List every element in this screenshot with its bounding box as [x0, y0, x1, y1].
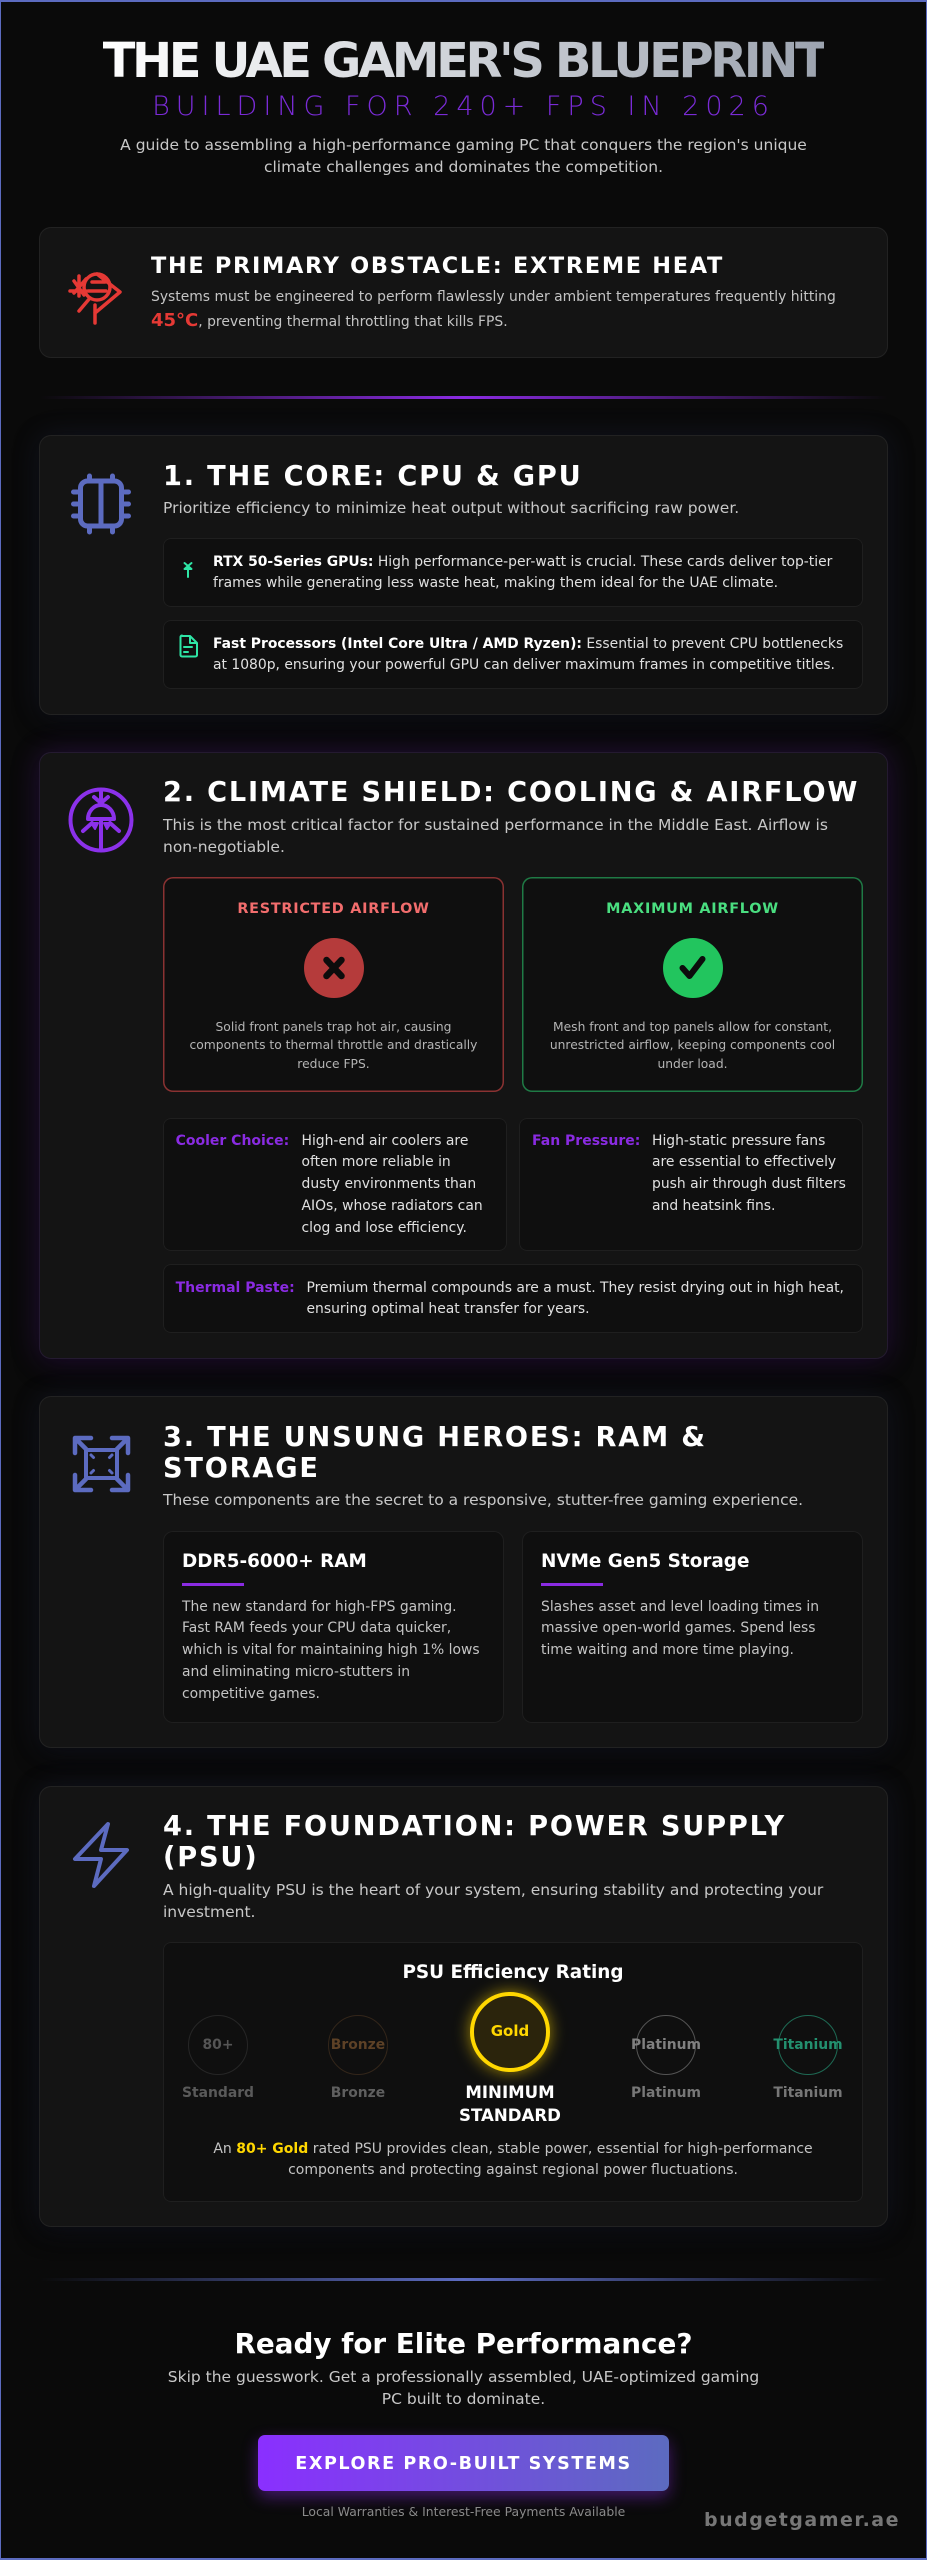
watermark: budgetgamer.ae: [704, 2509, 900, 2531]
comparison text: Mesh front and top panels allow for constant,: [553, 1020, 832, 1034]
panel: power supply: [39, 1786, 888, 2227]
text: ensuring optimal heat transfer for years.: [306, 1301, 590, 1317]
panel: ram and storage: [39, 1396, 888, 1748]
text: push air through dust filters: [652, 1176, 846, 1192]
title: THE UAE GAMER'S BLUEPRINT: [103, 33, 824, 89]
description: These components are the secret to a responsive, stutter-free gaming experience.: [163, 1491, 803, 1509]
text: Premium thermal compounds are a must. They resist drying out in high heat,: [306, 1280, 844, 1296]
rating: 80+ standard: 80+: [202, 2037, 233, 2053]
body text: Systems must be engineered to perform flawlessly under ambient temperatures frequently hitting: [151, 289, 836, 305]
card text: The new standard for high-FPS gaming.: [182, 1599, 457, 1615]
rating: platinum: [631, 2015, 701, 2101]
card text: Fast RAM feeds your CPU data quicker,: [182, 1620, 451, 1636]
icon: flame: [68, 272, 122, 325]
description: investment.: [163, 1903, 255, 1921]
card: ddr5 ram: [163, 1531, 504, 1723]
card text: massive open-world games. Spend less: [541, 1620, 815, 1636]
comparison: restricted airflow: [163, 877, 504, 1092]
comparison text: unrestricted airflow, keeping components cool: [550, 1038, 835, 1052]
button: EXPLORE PRO-BUILT SYSTEMS: [295, 2454, 632, 2474]
rating note: [213, 2141, 813, 2178]
heading: [163, 1422, 707, 1484]
text: are essential to effectively: [652, 1154, 836, 1170]
description: [168, 2368, 759, 2408]
comparison: maximum airflow: [522, 877, 863, 1092]
heading: PSU Efficiency Rating: [402, 1962, 624, 1983]
rating: gold minimum standard: MINIMUM: [465, 2083, 555, 2102]
card text: Slashes asset and level loading times in: [541, 1599, 819, 1615]
text: and heatsink fins.: [652, 1198, 775, 1214]
card text: Fast Processors (Intel Core Ultra / AMD Ryzen): Essential to prevent CPU bottlenecks: [213, 636, 843, 652]
rating: platinum: Platinum: [631, 2085, 701, 2101]
card heading: NVMe Gen5 Storage: [541, 1551, 749, 1572]
header: [103, 33, 824, 176]
description: non-negotiable.: [163, 838, 285, 856]
divider: [40, 396, 888, 399]
intro text: [120, 136, 807, 176]
heading: STORAGE: [163, 1453, 320, 1484]
card text: [213, 636, 843, 673]
description: Prioritize efficiency to minimize heat output without sacrificing raw power.: [163, 499, 739, 517]
body text: [151, 289, 836, 331]
button: [258, 2435, 669, 2491]
card: RTX GPUs: [163, 538, 863, 607]
icon: lightning bolt: [72, 1822, 130, 1888]
label: Cooler Choice:: [176, 1133, 289, 1149]
heading: [163, 1811, 786, 1873]
rating: titanium: Titanium: [773, 2037, 843, 2053]
description: [163, 1881, 824, 1921]
comparison text: components to thermal throttle and drastically: [190, 1038, 477, 1052]
rating: bronze: Bronze: [331, 2085, 385, 2101]
icon: fan: [68, 788, 134, 852]
comparison heading: MAXIMUM AIRFLOW: [606, 901, 779, 917]
card text: which is vital for maintaining high 1% lows: [182, 1642, 480, 1658]
rating: 80+ standard: Standard: [182, 2085, 254, 2101]
card text: frames while generating less waste heat, making them ideal for the UAE climate.: [213, 575, 778, 591]
rating: gold minimum standard: Gold: [491, 2022, 529, 2040]
card: psu efficiency rating: [163, 1942, 863, 2202]
footnote: Local Warranties & Interest-Free Payments Available: [302, 2504, 625, 2519]
panel: primary obstacle: [39, 227, 888, 358]
card text: and eliminating micro-stutters in: [182, 1664, 410, 1680]
accent bar: [182, 1583, 244, 1586]
card: thermal paste: [163, 1264, 863, 1333]
description: This is the most critical factor for sustained performance in the Middle East. Airflow is: [163, 816, 828, 834]
label: Fan Pressure:: [532, 1133, 640, 1149]
text: High-static pressure fans: [652, 1133, 825, 1149]
rating: titanium: [773, 2015, 843, 2101]
comparison text: [190, 1020, 477, 1071]
text: [306, 1280, 844, 1317]
text: High-end air coolers are: [302, 1133, 468, 1149]
heading: Ready for Elite Performance?: [235, 2327, 692, 2360]
text: often more reliable in: [302, 1154, 451, 1170]
card: fan pressure: [519, 1118, 863, 1251]
icon: document: [180, 634, 198, 658]
text: dusty environments than: [302, 1176, 476, 1192]
description: [162, 816, 828, 856]
description: PC built to dominate.: [382, 2390, 545, 2408]
comparison text: under load.: [657, 1057, 728, 1071]
card text: [213, 554, 832, 591]
text: AIOs, whose radiators can: [302, 1198, 483, 1214]
rating: bronze: [328, 2015, 388, 2101]
comparison text: [550, 1020, 835, 1071]
intro text: A guide to assembling a high-performance gaming PC that conquers the region's unique: [120, 136, 807, 154]
card text: RTX 50-Series GPUs: High performance-per-watt is crucial. These cards deliver top-tier: [213, 554, 832, 570]
icon: gpu: [184, 562, 192, 578]
subtitle: BUILDING FOR 240+ FPS IN 2026: [152, 91, 775, 122]
rating: gold minimum standard: STANDARD: [459, 2106, 561, 2125]
rating: titanium: Titanium: [773, 2085, 843, 2101]
text: [652, 1133, 846, 1214]
panel: the core: [39, 435, 888, 715]
heading: THE PRIMARY OBSTACLE: EXTREME HEAT: [151, 253, 724, 279]
comparison text: reduce FPS.: [297, 1057, 370, 1071]
heading: 1. THE CORE: CPU & GPU: [163, 461, 582, 492]
card: processors: [163, 620, 863, 689]
panel: climate shield: [39, 752, 888, 1359]
rating: bronze: Bronze: [331, 2037, 385, 2053]
card text: time waiting and more time playing.: [541, 1642, 794, 1658]
rating: 80+ standard: [182, 2015, 254, 2101]
card text: at 1080p, ensuring your powerful GPU can deliver maximum frames in competitive titles.: [213, 657, 835, 673]
body text: 45°C, preventing thermal throttling that kills FPS.: [151, 310, 508, 331]
heading: 3. THE UNSUNG HEROES: RAM &: [163, 1422, 707, 1453]
intro text: climate challenges and dominates the competition.: [264, 158, 663, 176]
heading: (PSU): [163, 1842, 258, 1873]
icon: expand: [72, 1436, 130, 1492]
description: A high-quality PSU is the heart of your system, ensuring stability and protecting your: [163, 1881, 823, 1899]
rating note: components and protecting against regional power fluctuations.: [288, 2162, 738, 2178]
accent bar: [541, 1583, 603, 1586]
icon: chip: [71, 474, 131, 534]
heading: 2. CLIMATE SHIELD: COOLING & AIRFLOW: [163, 777, 859, 808]
icon: check: [663, 938, 723, 998]
divider: [40, 2278, 888, 2281]
card heading: DDR5-6000+ RAM: [182, 1551, 367, 1572]
card text: competitive games.: [182, 1686, 320, 1702]
card text: [182, 1599, 480, 1702]
rating: platinum: Platinum: [631, 2037, 701, 2053]
text: [302, 1133, 483, 1236]
card: nvme storage: [522, 1531, 863, 1723]
card text: [541, 1599, 819, 1658]
label: Thermal Paste:: [176, 1280, 295, 1296]
heading: 4. THE FOUNDATION: POWER SUPPLY: [163, 1811, 786, 1842]
comparison text: Solid front panels trap hot air, causing: [216, 1020, 451, 1034]
description: Skip the guesswork. Get a professionally assembled, UAE-optimized gaming: [168, 2368, 759, 2386]
rating note: An 80+ Gold rated PSU provides clean, stable power, essential for high-performance: [213, 2141, 813, 2157]
rating: gold minimum standard: [459, 1981, 561, 2125]
comparison heading: RESTRICTED AIRFLOW: [237, 901, 430, 917]
card: cooler choice: [163, 1118, 507, 1251]
call to action: [168, 2327, 759, 2519]
icon: cross: [304, 938, 364, 998]
text: clog and lose efficiency.: [302, 1220, 467, 1236]
